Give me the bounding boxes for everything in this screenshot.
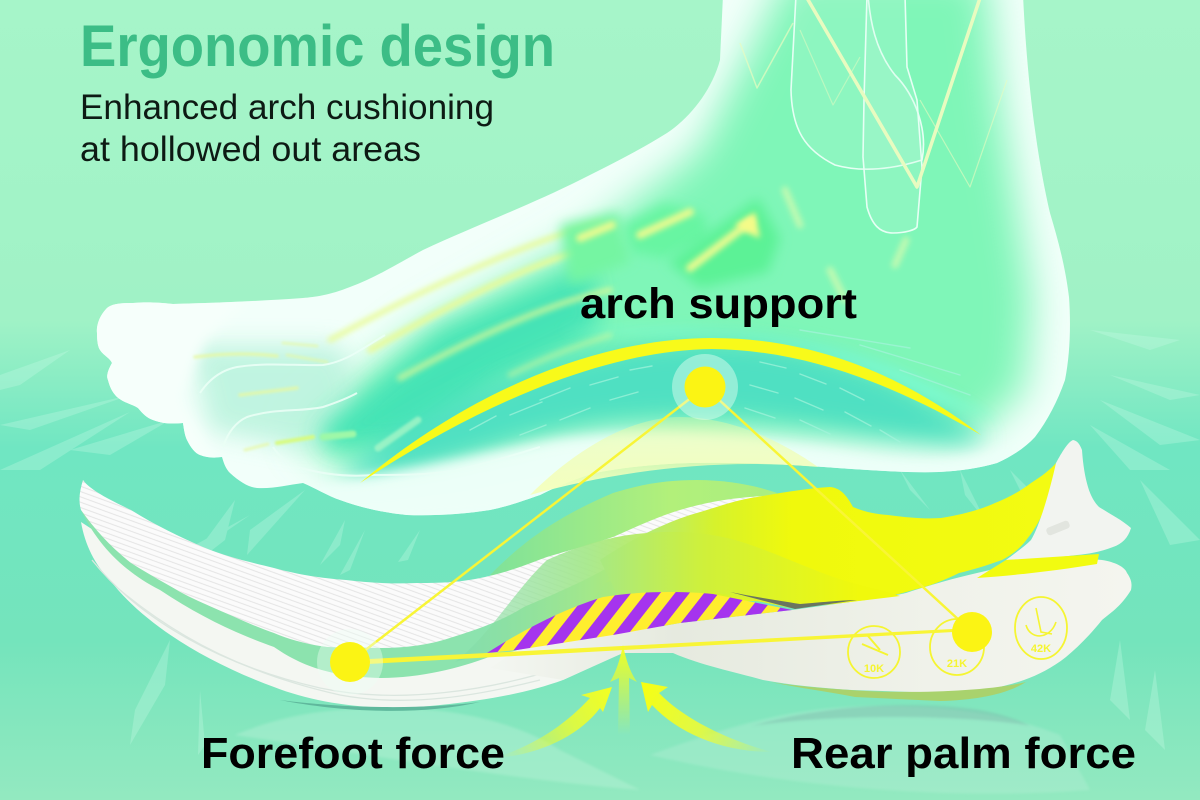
arch dashes [470, 330, 970, 442]
force connector lines [350, 387, 972, 665]
up arrow [610, 645, 637, 735]
foot illustration [90, 0, 1070, 530]
label: forefoot force: Forefoot force [201, 729, 505, 778]
21K badge [930, 619, 984, 675]
foot interior glow [90, 0, 1040, 530]
pale yellow fan under the arch point [530, 417, 818, 495]
yellow heel strip [977, 554, 1099, 578]
white heel cap [1006, 440, 1131, 560]
label: rear palm force: Rear palm force [791, 729, 1136, 778]
metatarsal streaks [330, 222, 610, 378]
42K badge [1015, 597, 1067, 659]
green lobe behind the insole [490, 480, 777, 600]
subtitle: Enhanced arch cushioning [80, 88, 494, 127]
left arrow [495, 687, 612, 758]
textured white top layer [80, 480, 790, 648]
force arrows [495, 645, 772, 758]
forefoot point marker [317, 629, 383, 695]
floor reflection of the shoe [235, 705, 1090, 794]
tarsal bones [560, 190, 906, 300]
lower green-to-yellow lobe [455, 532, 900, 662]
toe bones [195, 343, 418, 450]
toes white overlay [96, 302, 240, 458]
10K badge [848, 626, 900, 678]
midsole grooves [92, 560, 560, 700]
10K badge: 10K [864, 663, 884, 675]
striped carbon plate [487, 592, 792, 653]
arch point marker [672, 354, 738, 420]
toe ridges [200, 335, 540, 476]
arch curve highlight [360, 338, 981, 483]
21K badge: 21K [947, 658, 967, 670]
subtitle [80, 88, 494, 169]
background light shards [0, 330, 1200, 755]
white midsole, forefoot [81, 522, 700, 708]
foot silhouette [97, 0, 1070, 515]
subtitle: at hollowed out areas [80, 130, 421, 169]
42K badge: 42K [1031, 643, 1051, 655]
title: Ergonomic design [80, 14, 555, 79]
foot bottom white fade [309, 429, 1018, 516]
white outsole [490, 559, 1132, 693]
transparent green band [81, 510, 640, 678]
carbon edge [730, 592, 857, 609]
green tread [770, 682, 1026, 701]
insole and midsole [80, 480, 790, 711]
ankle zigzag lines [740, 0, 1007, 187]
right arrow [641, 682, 772, 752]
ankle bones [791, 0, 923, 233]
upper yellow foam wedge [600, 463, 1056, 603]
tread shadow [280, 700, 480, 711]
rear point marker [952, 612, 992, 652]
heel slot [1045, 520, 1071, 536]
forefoot pale tint [190, 345, 360, 450]
label: arch support: arch support [580, 280, 857, 328]
shoe heel section [455, 440, 1132, 701]
